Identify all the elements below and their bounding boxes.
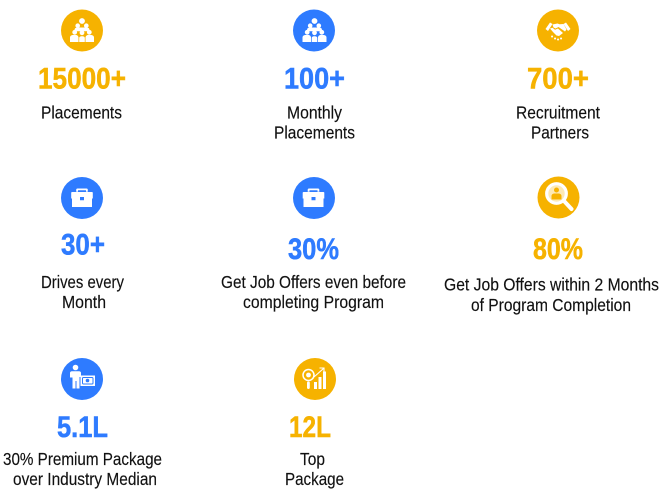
icon: magnifier and growth bars (294, 358, 336, 400)
number: 30+: 30+ (61, 228, 105, 262)
number: 15000+: 15000+ (38, 62, 126, 96)
number: 5.1L: 5.1L (57, 411, 108, 444)
label: Get Job Offers within 2 Months of Program Completion (444, 274, 659, 315)
label: Recruitment Partners: Partners (531, 122, 589, 142)
label: Top Package: Package (285, 469, 344, 489)
stat: 5.1L premium package (3, 358, 162, 489)
icon: people pyramid (293, 10, 335, 52)
stat: 30% offers before completing (221, 177, 406, 312)
label: Recruitment Partners (516, 102, 600, 142)
label: Monthly Placements: Monthly (287, 102, 342, 122)
number: 80%: 80% (533, 233, 583, 266)
number: 700+: 700+ (527, 62, 589, 96)
label: Get Job Offers within 2 Months of Program Completion: of Program Completion (471, 295, 631, 315)
icon: magnifier with person (538, 176, 580, 218)
label: 30% Premium Package over Industry Median: over Industry Median (13, 469, 157, 489)
stat: 700+ recruitment partners (516, 10, 600, 142)
stat: 100+ monthly placements (274, 10, 355, 142)
number: 12L: 12L (289, 411, 331, 444)
label: Recruitment Partners: Recruitment (516, 102, 600, 122)
stat: 12L top package (285, 358, 344, 489)
label: 30% Premium Package over Industry Median (3, 449, 162, 489)
label: 30% Premium Package over Industry Median: 30% Premium Package (3, 449, 162, 469)
stat: 30+ drives (41, 177, 124, 312)
label: Get Job Offers even before completing Program: completing Program (243, 292, 384, 312)
number: 100+: 100+ (284, 62, 345, 96)
label: Top Package (285, 449, 344, 489)
label: Placements: Placements (41, 102, 122, 122)
label: Get Job Offers even before completing Program (221, 272, 406, 312)
label: Drives every Month: Month (62, 292, 106, 312)
label: Drives every Month: Drives every (41, 272, 124, 292)
number: 30%: 30% (288, 233, 339, 266)
label: Monthly Placements (274, 102, 355, 142)
label: Get Job Offers even before completing Program: Get Job Offers even before (221, 272, 406, 292)
stat: 80% offers within 2 months (444, 176, 659, 315)
icon: person with banknote (61, 358, 103, 400)
icon: briefcase (61, 177, 103, 219)
label: Drives every Month (41, 272, 124, 312)
label: Monthly Placements: Placements (274, 122, 355, 142)
stat: 15000+ placements (38, 10, 126, 122)
label: Top Package: Top (300, 449, 325, 469)
icon: people pyramid (61, 10, 103, 52)
icon: briefcase (293, 177, 335, 219)
icon: handshake (537, 10, 579, 52)
